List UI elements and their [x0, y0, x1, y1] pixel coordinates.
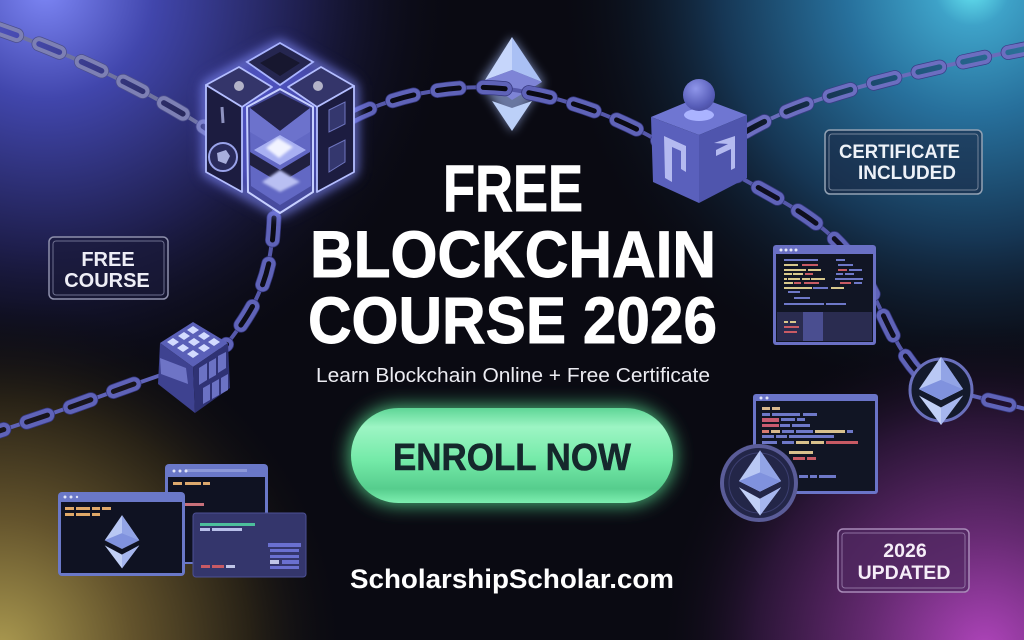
window: left settings panel: [193, 513, 306, 577]
button: enroll now: [349, 406, 675, 505]
button: enroll now: ENROLL NOW: [393, 437, 631, 479]
window: left with ethereum: [58, 492, 185, 576]
icon: ethereum diamond top: [480, 37, 544, 132]
chain: right exit: [965, 394, 1024, 410]
badge: certificate included: CERTIFICATE: [839, 142, 960, 163]
lower panel: [777, 312, 872, 341]
icon: isometric block cluster: [206, 43, 354, 213]
badge: 2026 updated: [838, 529, 969, 592]
badge: certificate included: [825, 130, 982, 194]
chain: right descending: [718, 165, 925, 380]
badge: free course: COURSE: [64, 270, 150, 292]
title line: COURSE 2026: COURSE 2026: [308, 283, 717, 357]
title line: BLOCKCHAIN: BLOCKCHAIN: [310, 217, 716, 291]
window: code right lower: [753, 394, 878, 494]
code lines: [784, 259, 863, 305]
coin: ethereum large: [720, 444, 798, 522]
chain: centre left descending: [226, 210, 274, 345]
window: code right upper: [773, 245, 876, 345]
code lines: [762, 407, 858, 478]
badge: free course: FREE: [81, 249, 135, 271]
badge: 2026 updated: UPDATED: [858, 562, 950, 584]
icon: cube with sphere: [651, 79, 747, 203]
chain: lower left: [0, 372, 170, 432]
title: [308, 151, 717, 357]
chain: top right: [745, 48, 1024, 132]
coin: ethereum small: [910, 357, 972, 425]
subtitle: Learn Blockchain Online + Free Certificate: [316, 364, 710, 387]
right block: [288, 67, 354, 192]
front block: [247, 89, 313, 213]
window: left rear code: [165, 464, 268, 564]
title line: FREE: FREE: [443, 151, 583, 225]
badge: certificate included: INCLUDED: [858, 163, 956, 184]
chain: top centre arc: [350, 87, 660, 142]
badge: free course: [49, 237, 168, 299]
icon: small rubik cube: [158, 322, 230, 413]
badge: 2026 updated: 2026: [883, 540, 927, 562]
chain: top left: [0, 28, 212, 132]
left block: [206, 67, 272, 192]
back tile: [247, 43, 313, 85]
website: ScholarshipScholar.com: [350, 564, 674, 594]
